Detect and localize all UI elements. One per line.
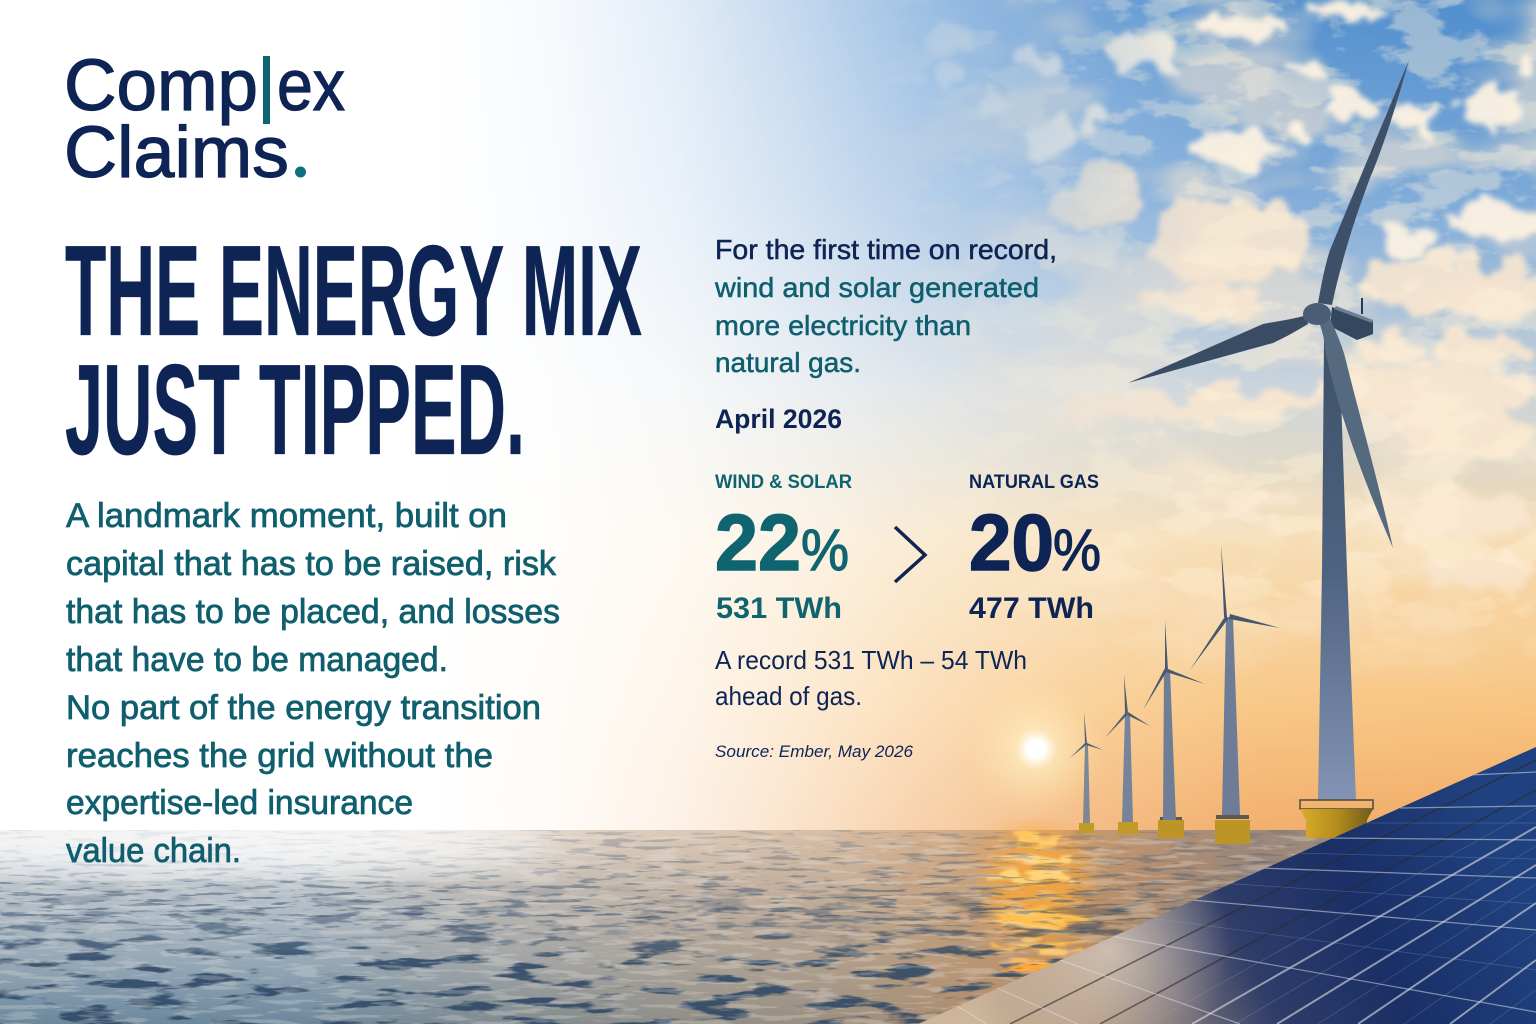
distant wind turbine 3 xyxy=(1143,620,1205,838)
main headline: JUST TIPPED. xyxy=(65,338,525,482)
turbine blade left xyxy=(1128,315,1308,383)
turbine blade down xyxy=(1318,318,1393,548)
body paragraph: expertise-led insurance xyxy=(66,784,413,822)
turbine hub xyxy=(1303,303,1331,325)
stat: natural gas: 20 xyxy=(969,498,1054,587)
body paragraph: that has to be placed, and losses xyxy=(66,593,560,631)
brand logo: Claims xyxy=(64,113,289,193)
brand logo: ex xyxy=(277,46,345,126)
intro statement: natural gas. xyxy=(715,347,861,378)
distant wind turbine 2 xyxy=(1105,675,1150,834)
record note xyxy=(715,645,1027,711)
body paragraph: that have to be managed. xyxy=(66,641,448,679)
sea haze behind text xyxy=(0,815,560,875)
main wind turbine xyxy=(1128,60,1409,838)
brand logo: Comp xyxy=(64,46,258,126)
body paragraph: reaches the grid without the xyxy=(66,737,493,775)
intro statement: more electricity than xyxy=(715,310,971,341)
stat: wind and solar xyxy=(715,472,852,625)
stat: wind and solar: WIND & SOLAR xyxy=(715,472,852,493)
intro statement: For the first time on record, xyxy=(715,234,1057,265)
turbine base platform xyxy=(1300,800,1373,838)
greater-than arrow xyxy=(895,527,925,582)
intro statement: wind and solar generated xyxy=(714,272,1039,303)
body paragraph: A landmark moment, built on xyxy=(66,497,507,535)
body paragraph: capital that has to be raised, risk xyxy=(66,545,557,583)
distant wind turbine 4 xyxy=(1190,544,1280,844)
stat: natural gas xyxy=(969,472,1101,625)
solar panel array xyxy=(900,740,1536,1024)
turbine nacelle xyxy=(1330,298,1373,340)
intro statement xyxy=(714,234,1057,378)
source note: Source: Ember, May 2026 xyxy=(715,742,914,761)
date: April 2026 xyxy=(715,404,842,434)
stat: natural gas: 477 TWh xyxy=(969,592,1094,625)
distant wind turbine 1 xyxy=(1070,712,1103,833)
body paragraph: value chain. xyxy=(66,832,241,870)
panel cell lines xyxy=(1148,808,1536,1024)
sun reflection on water xyxy=(986,830,1092,1006)
stat: natural gas: % xyxy=(1053,518,1101,583)
panel cross lines xyxy=(957,772,1536,1024)
main headline: THE ENERGY MIX xyxy=(65,219,642,363)
sea ripples xyxy=(0,830,1323,1024)
body paragraph: No part of the energy transition xyxy=(66,689,541,727)
stat: wind and solar: % xyxy=(801,518,849,583)
logo teal bar xyxy=(263,56,270,124)
record note: ahead of gas. xyxy=(715,681,862,711)
turbine tower xyxy=(1318,340,1356,800)
logo teal dot xyxy=(295,166,306,178)
panel long frame lines xyxy=(1192,827,1536,1024)
sun xyxy=(966,679,1106,819)
turbine blade up xyxy=(1318,60,1409,305)
stat: wind and solar: 22 xyxy=(715,498,801,587)
record note: A record 531 TWh – 54 TWh xyxy=(715,645,1027,675)
stat: natural gas: NATURAL GAS xyxy=(969,472,1099,493)
brand logo xyxy=(64,46,345,193)
sea xyxy=(0,819,1333,1024)
clouds xyxy=(914,0,1536,668)
main headline xyxy=(65,219,642,482)
body paragraph xyxy=(66,497,560,870)
stat: wind and solar: 531 TWh xyxy=(716,592,842,625)
